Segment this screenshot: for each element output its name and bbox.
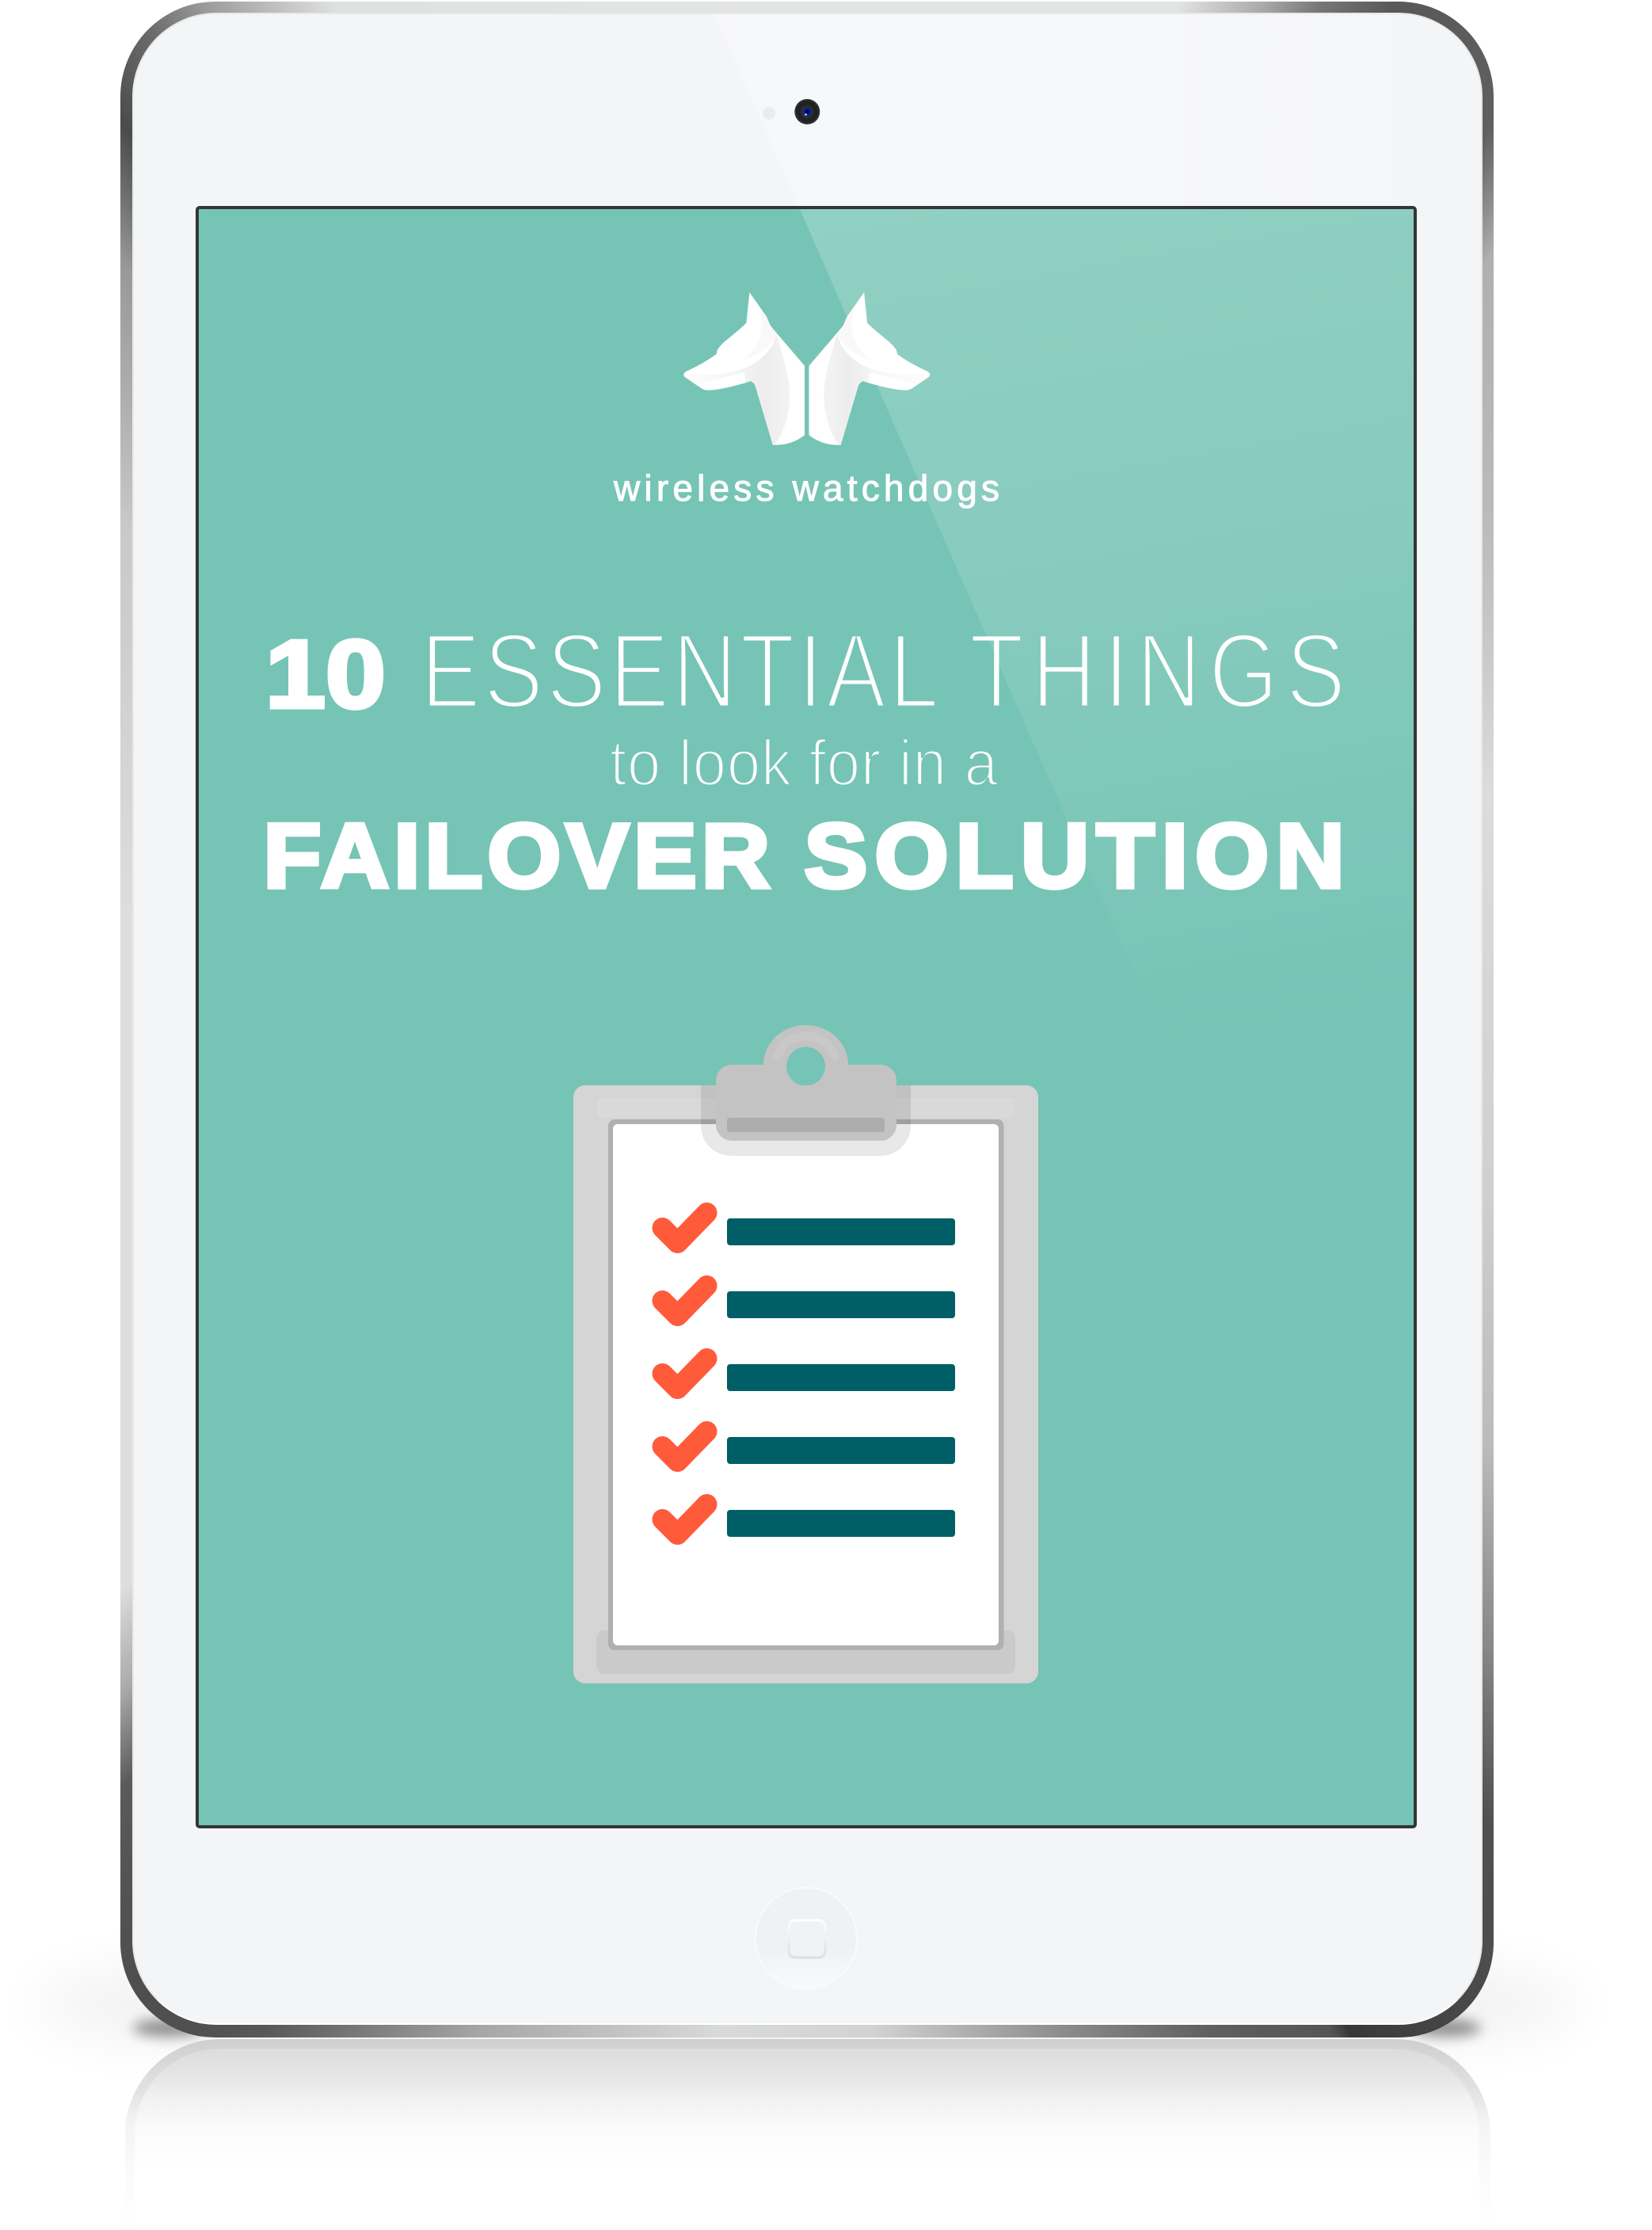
metal clip bbox=[716, 1025, 896, 1141]
title line 1: THINGS bbox=[969, 612, 1346, 730]
icon: left dog head bbox=[681, 292, 805, 446]
checklist row 4 bbox=[662, 1431, 955, 1464]
icon: ambient light sensor bbox=[763, 107, 775, 120]
title line 1: 10 bbox=[265, 620, 386, 728]
screen background bbox=[197, 208, 1415, 1827]
title line 3 bbox=[263, 805, 1345, 907]
title line 1 bbox=[265, 612, 1346, 730]
icon: clipboard checklist bbox=[573, 1025, 1038, 1683]
checklist row 3 bbox=[662, 1359, 955, 1391]
title line 3: FAILOVER bbox=[263, 805, 770, 907]
clipboard board bbox=[573, 1085, 1038, 1683]
checklist row 5 bbox=[662, 1504, 955, 1537]
tablet face bbox=[132, 13, 1483, 2025]
clip shadow bbox=[701, 1085, 911, 1156]
icon: front camera bbox=[794, 99, 820, 124]
title line 1: ESSENTIAL bbox=[421, 612, 938, 730]
tablet bezel bbox=[120, 2, 1494, 2037]
paper sheet bbox=[613, 1124, 999, 1645]
screen glare bbox=[800, 209, 1414, 1093]
logo wordmark: wireless watchdogs bbox=[613, 467, 999, 509]
title line 3: SOLUTION bbox=[805, 805, 1345, 907]
checklist row 2 bbox=[662, 1286, 955, 1318]
icon: home button bbox=[756, 1888, 857, 1989]
logo: wireless watchdogs dog heads bbox=[681, 292, 933, 446]
checklist row 1 bbox=[662, 1213, 955, 1245]
icon: right dog head bbox=[809, 292, 933, 446]
bezel glare bbox=[714, 13, 1483, 209]
title line 2: to look for in a bbox=[610, 726, 999, 799]
